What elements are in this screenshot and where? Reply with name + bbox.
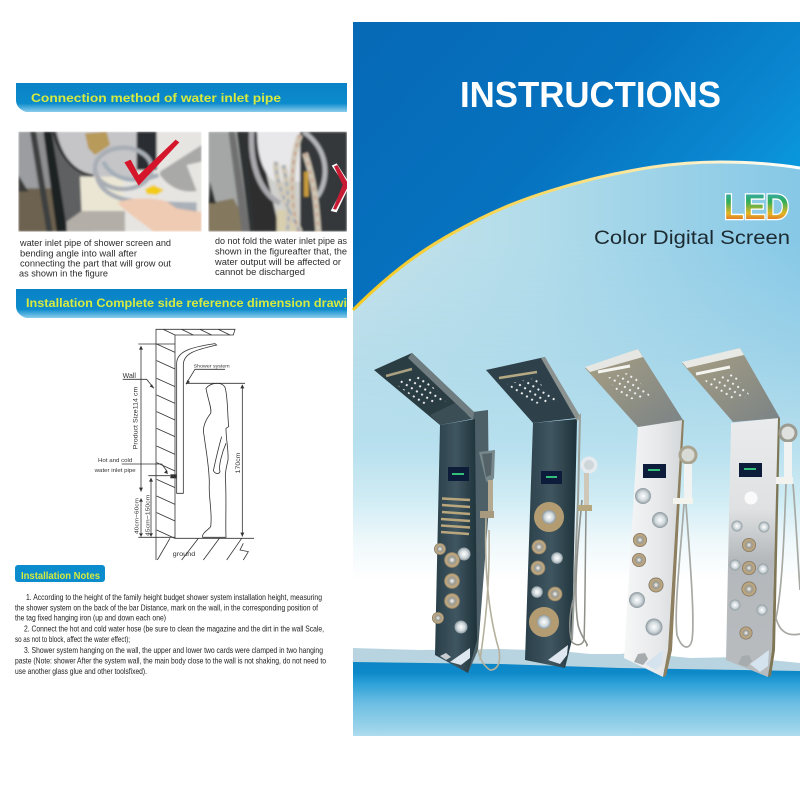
notes text: 1. According to the height of the family height budget shower system installation height, measuring bbox=[26, 592, 322, 602]
dimension lines bbox=[138, 344, 245, 537]
panel: connection method section bbox=[16, 83, 347, 278]
shower system outline bbox=[177, 344, 217, 493]
sea bbox=[353, 662, 800, 736]
notes text: so as not to block, affect the water effect); bbox=[15, 634, 130, 644]
panel: product poster bbox=[353, 22, 800, 736]
wall and ceiling bbox=[156, 329, 254, 560]
diagram labels: 45cm~150cm bbox=[145, 494, 151, 536]
caption: correct method: water inlet pipe of shower screen and bbox=[19, 238, 171, 248]
photo: correct pipe connection with check mark bbox=[18, 132, 202, 232]
diagram labels: ground bbox=[173, 551, 196, 558]
subheading: color digital screen: Color Digital Screen bbox=[594, 227, 790, 249]
person silhouette bbox=[202, 383, 229, 537]
poster lower gradient with yellow arc bbox=[352, 160, 800, 562]
product: steel shower panel 4 bbox=[682, 348, 800, 677]
diagram labels: 170cm bbox=[236, 453, 242, 473]
caption: incorrect method: do not fold the water inlet pipe as bbox=[215, 236, 347, 246]
header bar: dimension drawing bbox=[16, 289, 347, 318]
product: black shower panel 1 bbox=[374, 353, 500, 673]
diagram labels: Product Size114 cm bbox=[132, 386, 139, 449]
caption: incorrect method: shown in the figureafter that, the bbox=[215, 246, 347, 256]
poster sky bbox=[353, 22, 800, 322]
diagram labels: Hot and cold bbox=[98, 458, 132, 464]
heading: INSTRUCTIONS: INSTRUCTIONS bbox=[460, 74, 721, 115]
caption: correct method: bending angle into wall after bbox=[20, 248, 137, 258]
diagram labels: Shower system bbox=[194, 364, 230, 370]
diagram: side dimension drawing bbox=[94, 329, 254, 560]
diagram labels: 40cm~60cm bbox=[135, 498, 141, 534]
header bar: connection method bbox=[16, 83, 347, 112]
caption: incorrect method bbox=[214, 236, 347, 277]
diagram labels bbox=[94, 364, 242, 558]
product: silver shower panel 3 bbox=[585, 349, 698, 677]
header bar: installation notes bbox=[15, 565, 105, 582]
caption: incorrect method: cannot be discharged bbox=[215, 267, 305, 277]
photo: incorrect folded pipe with cross mark bbox=[208, 132, 347, 232]
notes text: use another glass glue and other toolsfixed). bbox=[15, 666, 147, 676]
notes text: the tag fixed hanging iron (up and down each one) bbox=[15, 612, 166, 622]
diagram labels: water inlet pipe bbox=[94, 468, 136, 474]
notes text: 2. Connect the hot and cold water hose (be sure to clean the magazine and the dirt in the wall Scale, bbox=[24, 624, 324, 634]
caption: correct method: connecting the part that will grow out bbox=[20, 258, 171, 268]
product: black shower panel 2 bbox=[486, 357, 598, 668]
diagram labels: Wall bbox=[123, 373, 136, 380]
panel: side reference dimension section bbox=[16, 289, 347, 560]
distant mountains bbox=[353, 648, 800, 674]
header bar: installation notes: Installation Notes bbox=[21, 571, 101, 582]
caption: incorrect method: water output will be affected or bbox=[214, 257, 341, 267]
header bar: dimension drawing: Installation Complete side reference dimension drawi bbox=[26, 296, 347, 310]
notes text: paste (Note: shower After the system wall, the main body close to the wall is not shaking, do not need to bbox=[15, 656, 326, 666]
caption: correct method bbox=[19, 238, 171, 278]
notes text bbox=[15, 592, 326, 676]
notes text: 3. Shower system hanging on the wall, the upper and lower two cards were clamped in two hanging bbox=[24, 645, 323, 655]
heading: LED: LED bbox=[724, 188, 789, 227]
notes text: the shower system on the back of the bar Distance, mark on the wall, in the corresponding position of bbox=[15, 602, 319, 612]
header bar: connection method: Connection method of water inlet pipe bbox=[31, 91, 281, 105]
caption: correct method: as shown in the figure bbox=[19, 268, 108, 278]
panel: installation notes bbox=[15, 565, 326, 676]
